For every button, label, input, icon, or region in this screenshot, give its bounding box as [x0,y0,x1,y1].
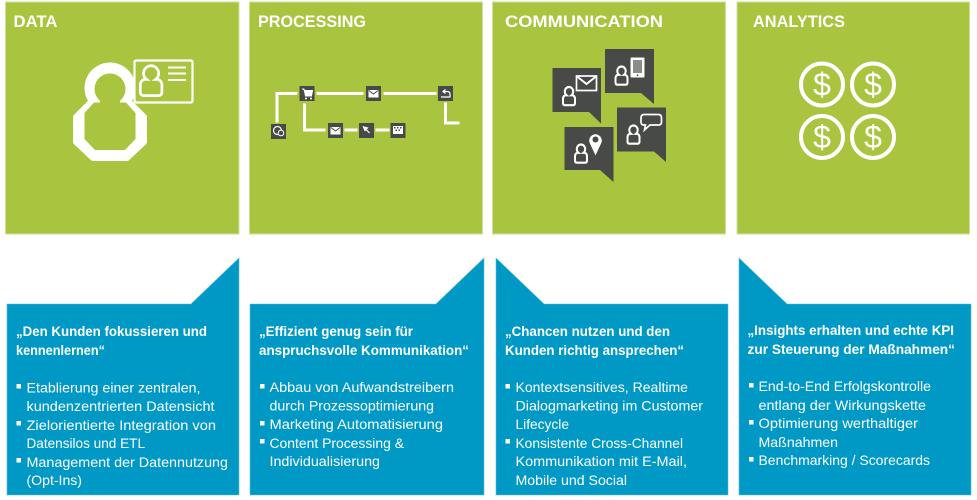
bubble: location [564,127,614,182]
bullet list: Marketing Automatisierung [270,416,443,432]
bullet list: Management der Datennutzung [26,454,228,470]
bullet list: Content Processing & [270,435,405,451]
diagram: process flow [271,86,458,139]
bullet list: Kommunikation mit E-Mail, [516,453,687,469]
icon: dollar coins [801,64,894,158]
heading: data: DATA [14,12,58,31]
bullet list: Etablierung einer zentralen, [26,380,200,396]
icon: return node [438,86,453,101]
panel: analytics [737,2,970,234]
callout heading: anspruchsvolle Kommunikation“ [259,342,469,358]
icon: start node [271,124,286,139]
bubble: mobile [605,49,654,104]
bubble: email [552,68,601,124]
bullet list: End-to-End Erfolgskontrolle [758,378,931,394]
bullet list: Optimierung werthaltiger [758,415,918,431]
icon: person with id card [76,60,192,158]
icon: speech bubbles [552,49,666,182]
callout heading [505,323,684,358]
bullet list: (Opt-Ins) [26,472,82,488]
callout heading [259,323,469,358]
callout heading: „Insights erhalten und echte KPI [748,322,954,338]
heading: communication: COMMUNICATION [505,12,663,31]
bullet list: entlang der Wirkungskette [758,397,926,413]
bullet list [749,378,931,468]
callout heading: zur Steuerung der Maßnahmen“ [748,341,955,357]
bullet list: Datensilos und ETL [26,435,145,451]
callout heading: „Chancen nutzen und den [505,323,670,339]
coin symbols: $ [813,119,831,155]
callout heading: „Den Kunden fokussieren und [16,323,207,339]
bullet list: Dialogmarketing im Customer [516,398,703,414]
heading: analytics: ANALYTICS [753,12,845,31]
bullet list: kundenzentrierten Datensicht [26,398,215,414]
heading: processing: PROCESSING [258,12,366,31]
callout: analytics [739,258,971,495]
callout heading [16,323,207,358]
bullet list: durch Prozessoptimierung [270,398,434,414]
panel: communication [492,2,726,234]
coin symbols: $ [864,66,882,102]
bullet list [260,379,454,469]
bullet list: Zielorientierte Integration von [26,417,216,433]
icon: cart node [300,86,314,101]
callout heading: kennenlernen“ [16,342,105,358]
callout: processing [250,258,484,495]
bubble: chat [617,108,666,162]
bullet list: Mobile und Social [516,472,627,488]
callout heading: Kunden richtig ansprechen“ [505,342,684,358]
icon: mail node [366,86,381,101]
panel: data [6,2,239,234]
bullet list: Benchmarking / Scorecards [758,452,930,468]
bullet list: Maßnahmen [758,434,838,450]
coin symbols: $ [813,66,831,102]
icon: mail node 2 [328,123,343,138]
bullet list: Kontextsensitives, Realtime [516,379,688,395]
callout: communication [496,258,728,495]
bullet list: Abbau von Aufwandstreibern [270,379,454,395]
bullet list [16,380,228,488]
bullet list: Konsistente Cross-Channel [516,435,683,451]
callout heading [748,322,955,357]
icon: flag node [390,123,406,138]
bullet list [506,379,703,488]
coin symbols: $ [864,119,882,155]
coin symbols [813,66,882,155]
callout: data [7,258,239,495]
icon: cursor node [359,123,374,138]
bullet list: Lifecycle [516,416,569,432]
panel: processing [250,2,482,234]
bullet list: Individualisierung [270,453,380,469]
callout heading: „Effizient genug sein für [259,323,414,339]
